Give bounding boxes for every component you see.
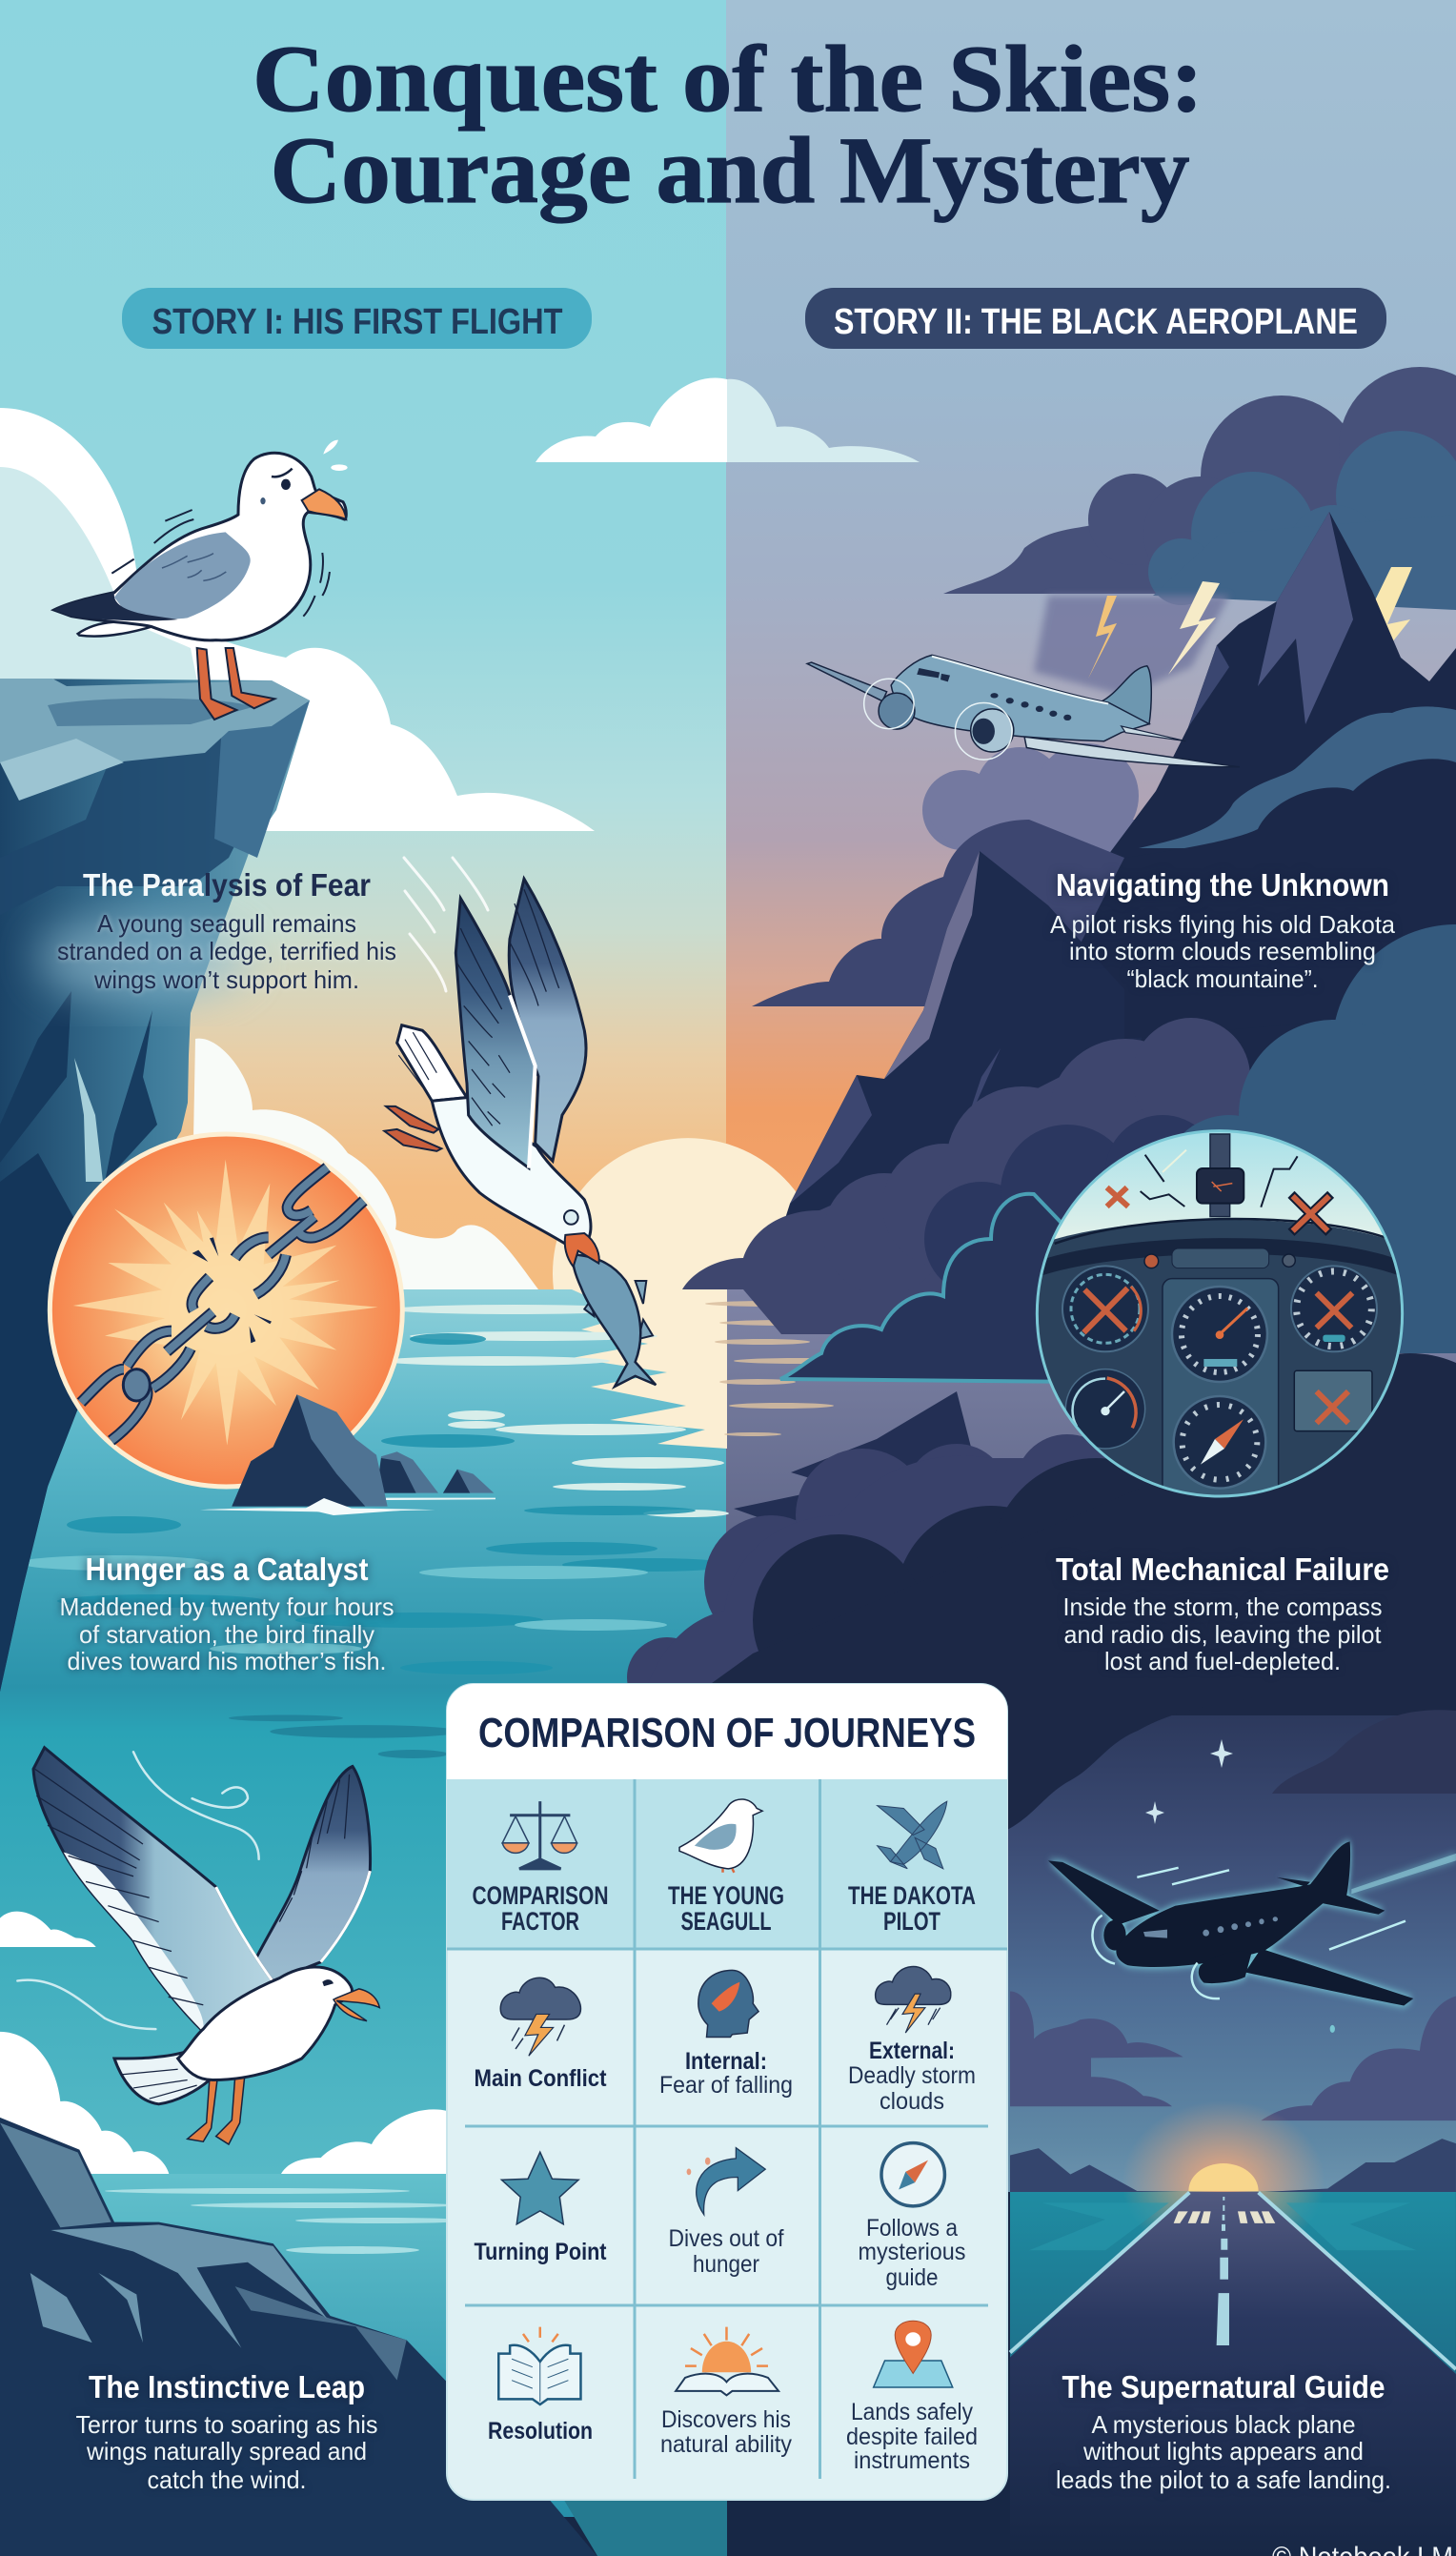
radio screen	[1294, 1370, 1372, 1431]
flying seagull	[33, 1748, 379, 2144]
diving gull back wing	[509, 879, 586, 1161]
teal storm clouds right	[1163, 924, 1456, 1353]
icon: open book	[498, 2327, 580, 2404]
centre cloud	[536, 377, 920, 462]
runway landing scene	[1010, 2100, 1456, 2556]
story II heading pill	[805, 288, 1386, 349]
caption: Total Mechanical Failure: Total Mechanical Failure	[1056, 1552, 1389, 1587]
stormy lower right clouds	[1010, 1992, 1456, 2120]
failure crosses	[1083, 1187, 1352, 1423]
diving gull body	[432, 1098, 591, 1244]
gull wing feather marks	[162, 554, 226, 580]
diving gull feet	[384, 1106, 441, 1151]
black aeroplane with teal glow	[1048, 1841, 1456, 2005]
row: Resolution: instruments	[854, 2447, 970, 2474]
rock facets	[0, 2123, 407, 2381]
sea reflection and waves: story I	[19, 1289, 734, 1674]
left lower pale cloud behind orb	[191, 1039, 538, 1289]
icon: seagull	[679, 1799, 762, 1873]
gull tail lower feather	[78, 622, 152, 637]
lower section sea under card bottom	[562, 2497, 727, 2556]
foam under rock	[305, 1498, 400, 1515]
tailplane far	[1277, 1877, 1310, 1887]
icon: head with fish	[698, 1970, 758, 2038]
caption: Hunger as a Catalyst: dives toward his mother’s fish.	[67, 1647, 387, 1675]
runway sun	[1188, 2163, 1259, 2191]
near wing	[1245, 1949, 1413, 2005]
background: story II sea	[726, 1289, 1456, 1709]
main title: Courage and Mystery	[271, 117, 1189, 223]
caption: The Instinctive Leap: catch the wind.	[147, 2465, 307, 2494]
rim-lit cloud left of instrument panel	[780, 1194, 1086, 1382]
icon: compass	[881, 2143, 944, 2206]
gull beak	[302, 489, 346, 519]
flying gull tail	[114, 2051, 210, 2104]
caption: Total Mechanical Failure: and radio dis, leaving the pilot	[1063, 1620, 1382, 1649]
main title: Conquest of the Skies:	[253, 26, 1203, 132]
caption: Hunger as a Catalyst: Maddened by twenty four hours	[59, 1592, 394, 1621]
caption: Hunger as a Catalyst	[59, 1552, 394, 1675]
icon: sunrise over book	[676, 2327, 779, 2395]
caption: The Instinctive Leap: Terror turns to soaring as his	[76, 2410, 377, 2439]
front teal cloud near mountain	[1139, 706, 1456, 848]
streaks of wind	[17, 1752, 259, 2029]
pale glow behind caption	[38, 915, 248, 1001]
gauge 1	[1062, 1266, 1148, 1351]
caption: Navigating the Unknown: into storm clouds resembling	[1069, 937, 1376, 965]
flying gull beak	[334, 1989, 379, 2021]
icon: star	[501, 2152, 578, 2224]
table header labels: FACTOR	[501, 1907, 579, 1936]
tail fin	[1100, 666, 1151, 724]
row: Main Conflict: Fear of falling	[659, 2072, 793, 2099]
instrument bezel	[1037, 1131, 1403, 1496]
runway centre dashes	[1217, 2197, 1229, 2345]
row: Turning Point: mysterious	[858, 2239, 966, 2265]
centre console	[1163, 1279, 1279, 1508]
runway surface	[1010, 2192, 1456, 2556]
gauge 2 speed	[1172, 1287, 1267, 1382]
row: Turning Point: guide	[886, 2264, 938, 2291]
table header labels: PILOT	[883, 1907, 940, 1936]
comparison card	[447, 1684, 1007, 2500]
table header labels: THE YOUNG	[668, 1881, 784, 1910]
back clouds beside second peak	[752, 820, 1124, 1006]
row: Resolution: Lands safely	[851, 2399, 973, 2425]
gull legs	[197, 648, 274, 720]
broken chain orb	[50, 1134, 402, 1507]
scared seagull on ledge	[54, 440, 348, 720]
diving gull tail	[397, 1025, 467, 1101]
windows	[1143, 1917, 1278, 1938]
dark lower storm mass	[627, 1353, 1456, 1830]
small cloud	[0, 1912, 96, 1947]
windows	[917, 668, 1071, 720]
top panel strip	[1172, 1248, 1269, 1268]
diving seagull with fish	[384, 879, 656, 1387]
header row band	[447, 1779, 1007, 1949]
background: story I sky	[0, 0, 727, 1290]
flying gull body	[178, 1967, 352, 2079]
gauge 5 compass	[1174, 1396, 1265, 1489]
chain fill	[81, 1167, 364, 1441]
icon: aeroplane	[878, 1801, 947, 1869]
dark streaks of sky	[229, 1714, 460, 1758]
row: Main Conflict: Main Conflict	[475, 2065, 607, 2092]
dusky foreground storm clouds	[682, 1018, 1250, 1334]
caption: The Instinctive Leap: The Instinctive Leap	[89, 2369, 365, 2404]
row: Turning Point: Follows a	[866, 2215, 958, 2242]
caption: Navigating the Unknown	[1050, 867, 1396, 993]
table header labels: SEAGULL	[680, 1907, 772, 1936]
caption: Hunger as a Catalyst: of starvation, the bird finally	[79, 1620, 374, 1649]
caption: The Supernatural Guide: A mysterious black plane	[1092, 2410, 1355, 2439]
storm vapour behind plane	[922, 596, 1229, 867]
icon: storm cloud	[500, 1978, 580, 2056]
distant mountains	[1010, 2139, 1456, 2192]
gull face	[260, 440, 348, 504]
rocks in the sea	[200, 1451, 495, 1512]
icon: map pin	[874, 2321, 953, 2387]
gauge 3	[1291, 1266, 1377, 1351]
gull dark tail	[54, 593, 178, 620]
card title: COMPARISON OF JOURNEYS	[478, 1710, 976, 1756]
panel	[1039, 1220, 1401, 1485]
caption: The Paralysis of Fear	[57, 867, 396, 994]
caption: Total Mechanical Failure: Inside the storm, the compass	[1063, 1592, 1382, 1621]
engines	[879, 693, 1014, 752]
broken wires	[1141, 1150, 1298, 1207]
black mountain main	[1048, 512, 1456, 1144]
near wing	[33, 1748, 276, 2032]
flying gull eye	[322, 1979, 334, 1986]
top-left night cloud	[1007, 1696, 1258, 1830]
fuselage	[1116, 1841, 1385, 1967]
row: Turning Point: Turning Point	[475, 2239, 607, 2265]
card header white band	[447, 1684, 1007, 1779]
row: Turning Point	[475, 2215, 966, 2291]
row: Main Conflict: External:	[869, 2038, 955, 2064]
background: story I sea and lower sky	[0, 1289, 727, 2174]
starburst	[73, 1160, 378, 1446]
diving gull front wing	[455, 899, 536, 1168]
chain shards	[192, 1237, 272, 1343]
cliff ledge and wall	[0, 679, 310, 1692]
row: Main Conflict	[475, 2038, 976, 2115]
table header labels: COMPARISON	[473, 1881, 608, 1910]
threshold stripes	[1174, 2211, 1275, 2223]
caption: The Supernatural Guide: without lights appears and	[1082, 2437, 1364, 2465]
icon: scales	[502, 1801, 577, 1869]
flying gull legs	[188, 2078, 245, 2144]
caption: The Supernatural Guide: leads the pilot to a safe landing.	[1056, 2465, 1391, 2494]
caption: Navigating the Unknown: “black mountaine”.	[1126, 964, 1319, 993]
table icons	[498, 1799, 953, 2404]
caption: The Supernatural Guide: The Supernatural Guide	[1062, 2369, 1385, 2404]
near engine	[1199, 1952, 1251, 1983]
story I heading pill: STORY I: HIS FIRST FLIGHT	[152, 302, 562, 342]
lower left rock	[0, 2118, 597, 2556]
diving gull beak	[565, 1233, 599, 1267]
row: Resolution: natural ability	[660, 2431, 792, 2458]
big rock	[232, 1394, 388, 1507]
lightning bolts	[1088, 567, 1412, 694]
caption: Navigating the Unknown: A pilot risks flying his old Dakota	[1050, 910, 1396, 939]
white clouds behind the ledge	[0, 408, 595, 831]
wall dark lower	[0, 1153, 86, 1692]
row: Resolution: despite failed	[846, 2424, 978, 2450]
navy shade behind Navigating caption	[1124, 759, 1456, 1039]
right cloud	[281, 2109, 448, 2174]
lower left sea band	[0, 2174, 727, 2517]
table header labels	[473, 1881, 976, 1936]
row: Turning Point: hunger	[693, 2251, 759, 2278]
gauge 4	[1065, 1369, 1145, 1449]
caption: Navigating the Unknown: Navigating the Unknown	[1056, 867, 1389, 903]
prop rings and speed lines	[1092, 1868, 1405, 2033]
orb disc	[50, 1134, 402, 1487]
near wing	[1024, 737, 1240, 767]
row: Main Conflict: clouds	[880, 2088, 944, 2115]
caption: The Paralysis of Fear: The Paralysis of Fear	[83, 867, 371, 903]
water	[1010, 2191, 1456, 2556]
caption: The Paralysis of Fear: A young seagull remains	[97, 909, 356, 938]
windshield	[1054, 1132, 1385, 1239]
chain knot	[123, 1369, 150, 1401]
icon: storm with rain	[876, 1967, 951, 2033]
caption: The Instinctive Leap: wings naturally spread and	[86, 2437, 367, 2465]
row: Turning Point: Dives out of	[669, 2225, 784, 2252]
background: story II sky	[726, 0, 1456, 1290]
background: bottom navy ground	[0, 2192, 1456, 2556]
row: Main Conflict: Internal:	[685, 2048, 767, 2075]
sea reflection: story II	[705, 1301, 991, 1539]
tailplane	[1122, 726, 1185, 741]
mirror post	[1197, 1134, 1244, 1217]
setting sun	[553, 1138, 823, 1289]
far engine	[1103, 1920, 1126, 1951]
fuselage	[891, 655, 1149, 741]
lower left clouds	[0, 1714, 460, 2174]
far wing	[807, 662, 887, 701]
big cloud	[0, 2032, 169, 2174]
top-right night cloud	[1272, 1710, 1456, 1794]
story II heading pill: STORY II: THE BLACK AEROPLANE	[834, 302, 1358, 342]
table header labels: THE DAKOTA	[848, 1881, 976, 1910]
streak	[1351, 1854, 1456, 1894]
row: Resolution	[488, 2399, 978, 2474]
gull body	[54, 453, 346, 640]
row: Resolution: Discovers his	[661, 2406, 791, 2433]
caption: The Paralysis of Fear: wings won’t support him.	[93, 965, 359, 994]
ledge top	[0, 679, 310, 762]
dark second peak	[762, 851, 1143, 1289]
caption: Hunger as a Catalyst: Hunger as a Catalyst	[86, 1552, 368, 1587]
diving gull fish	[573, 1254, 656, 1387]
caption: The Instinctive Leap	[76, 2369, 377, 2494]
card body	[447, 1684, 1007, 2500]
chain outline	[81, 1167, 364, 1441]
water streaks	[1029, 2202, 1417, 2250]
row: Main Conflict: Deadly storm	[848, 2062, 976, 2089]
runway edges	[1010, 2192, 1456, 2369]
propeller rings	[864, 679, 1012, 760]
storm cloud top right	[943, 367, 1456, 610]
caption: Total Mechanical Failure: lost and fuel-depleted.	[1104, 1647, 1341, 1675]
gull wing	[114, 532, 251, 619]
background: story II night sky	[726, 1696, 1456, 2192]
Dakota aeroplane	[807, 655, 1240, 767]
motion streaks above diving gull	[404, 858, 488, 991]
story I heading pill	[122, 288, 592, 349]
caption: The Supernatural Guide	[1056, 2369, 1391, 2494]
cliff wall	[0, 679, 310, 1692]
diving gull eye	[564, 1210, 578, 1225]
caption: Total Mechanical Failure	[1056, 1552, 1389, 1675]
table lines	[447, 1779, 1007, 2479]
main title	[253, 26, 1203, 223]
icon: dive arrow	[687, 2148, 765, 2215]
caption: The Paralysis of Fear: stranded on a ledge, terrified his	[57, 937, 396, 965]
far wing	[1048, 1860, 1160, 1925]
cockpit instrument panel	[1029, 1127, 1410, 1515]
far wing	[254, 1766, 371, 1980]
row: Resolution: Resolution	[488, 2418, 593, 2444]
sun glow	[1122, 2100, 1325, 2262]
fuselage highlight	[932, 657, 1108, 703]
stars in night sky	[1145, 1739, 1233, 1824]
